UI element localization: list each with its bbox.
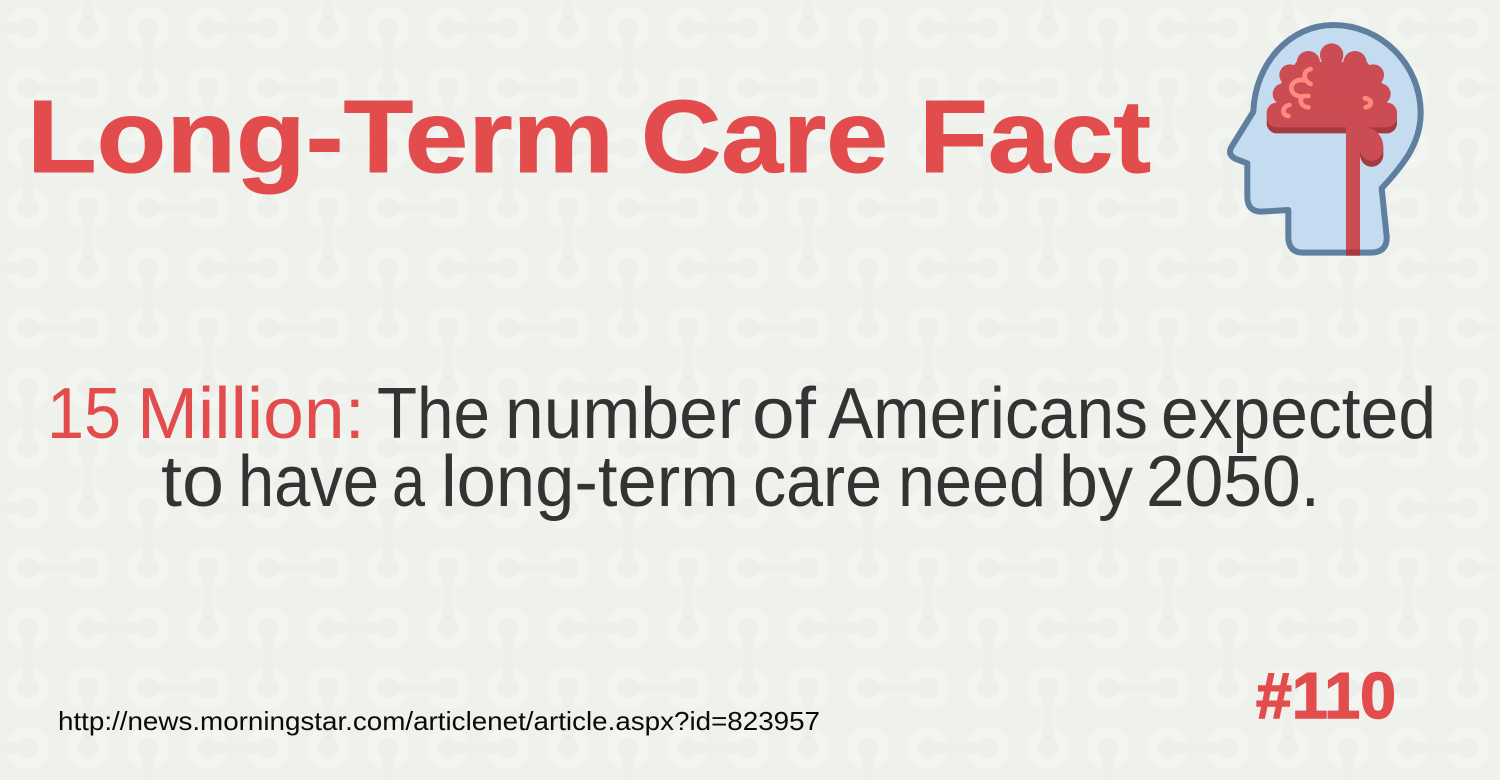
fact line one: Americans [828, 374, 1148, 454]
fact statement [47, 374, 1436, 522]
icon: brain [1267, 43, 1397, 256]
highlighted figure: Million: [137, 374, 365, 454]
fact line two: care [753, 442, 882, 522]
fact line two: long-term [441, 442, 739, 522]
title [27, 79, 1151, 194]
fact line two: to [161, 442, 224, 522]
fact number: #110 [1256, 659, 1396, 732]
title: Long-Term [27, 79, 614, 194]
fact line two: have [238, 442, 379, 522]
fact line one: expected [1161, 374, 1436, 454]
fact line two: 2050. [1146, 442, 1320, 522]
icon: head with brain [1230, 25, 1421, 256]
fact line two: a [392, 442, 426, 522]
fact line one: The [377, 374, 490, 454]
fact line two: need [898, 442, 1046, 522]
fact line one [377, 374, 1436, 454]
source url: http://news.morningstar.com/articlenet/article.aspx?id=823957 [58, 706, 820, 736]
fact line one: of [752, 374, 817, 454]
title: Fact [919, 79, 1151, 194]
fact line two [161, 442, 1320, 522]
highlighted figure: 15 [47, 374, 121, 454]
fact line one: number [505, 374, 741, 454]
fact line two: by [1059, 442, 1133, 522]
title: Care [641, 79, 888, 194]
icon: head silhouette [1230, 25, 1421, 253]
